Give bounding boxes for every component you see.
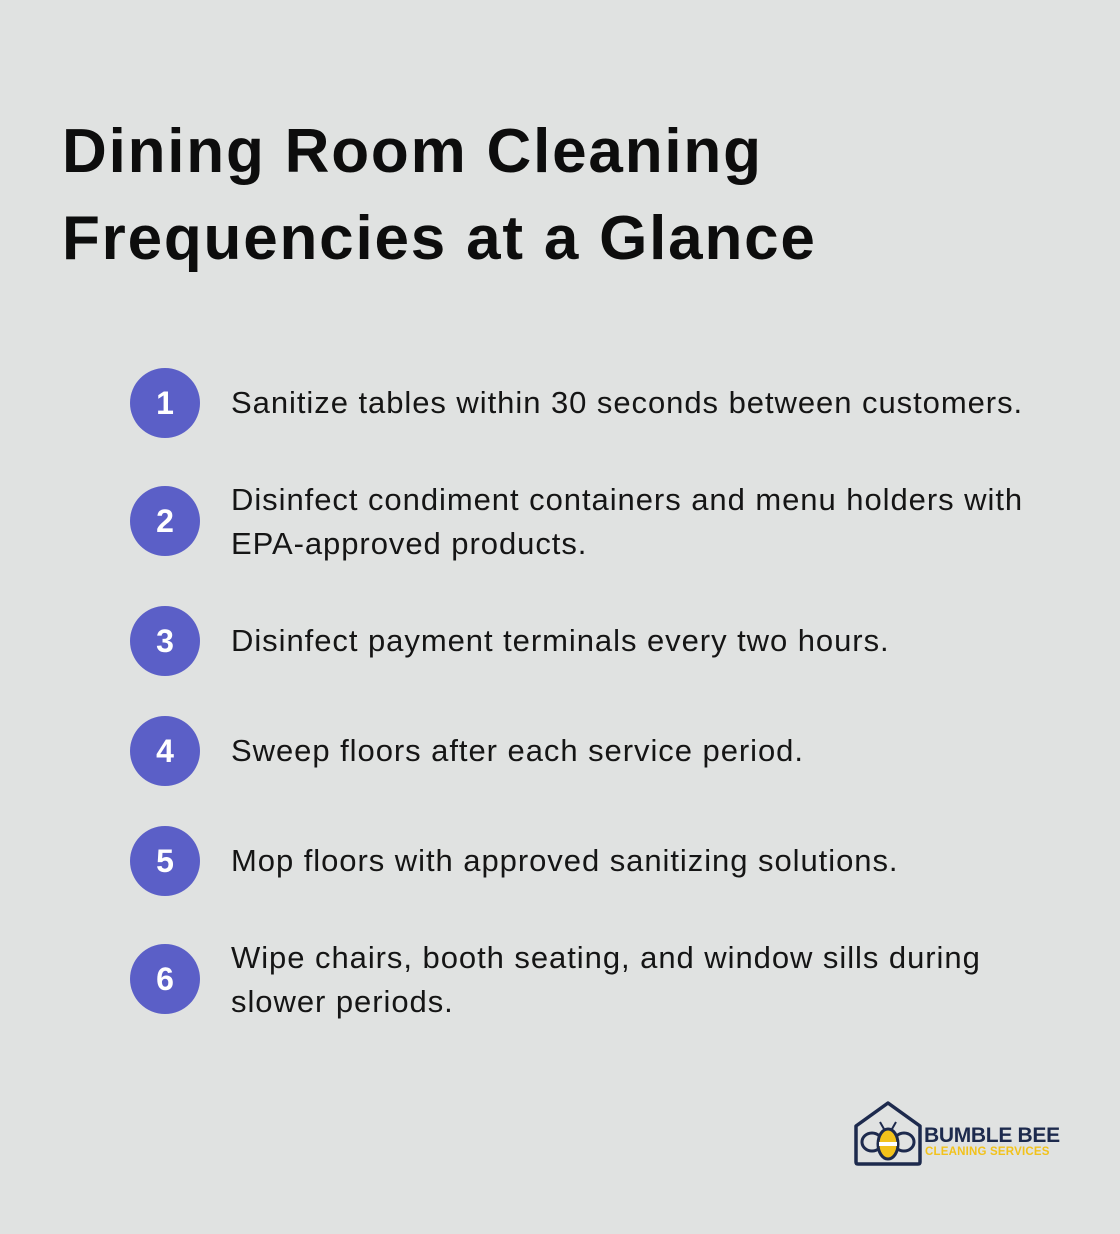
item 2 (130, 482, 1023, 561)
item 1 (130, 368, 1023, 438)
item 4: Sweep floors after each service period. (231, 733, 804, 768)
logo: CLEANING SERVICES (925, 1146, 1050, 1158)
item 2: 2 (156, 503, 174, 539)
item 5: Mop floors with approved sanitizing solutions. (231, 843, 898, 878)
item 3: Disinfect payment terminals every two hours. (231, 623, 890, 658)
item 5: 5 (156, 843, 174, 879)
icon: bee house (854, 1101, 922, 1166)
item 1: 1 (156, 385, 174, 421)
item 3 (130, 606, 890, 676)
item 4 (130, 716, 804, 786)
item 6: 6 (156, 961, 174, 997)
item 5 (130, 826, 898, 896)
item 6: Wipe chairs, booth seating, and window sills during (231, 940, 981, 975)
title: Dining Room Cleaning (62, 117, 763, 186)
item 4: 4 (156, 733, 174, 769)
title (62, 117, 817, 273)
item 6 (130, 940, 981, 1019)
item 2: Disinfect condiment containers and menu holders with (231, 482, 1023, 517)
item 2: EPA-approved products. (231, 526, 587, 561)
logo (854, 1101, 1060, 1166)
title: Frequencies at a Glance (62, 204, 817, 273)
logo text: BUMBLE BEE (924, 1124, 1060, 1147)
item 1: Sanitize tables within 30 seconds between customers. (231, 385, 1023, 420)
item 6: slower periods. (231, 984, 454, 1019)
item 3: 3 (156, 623, 174, 659)
